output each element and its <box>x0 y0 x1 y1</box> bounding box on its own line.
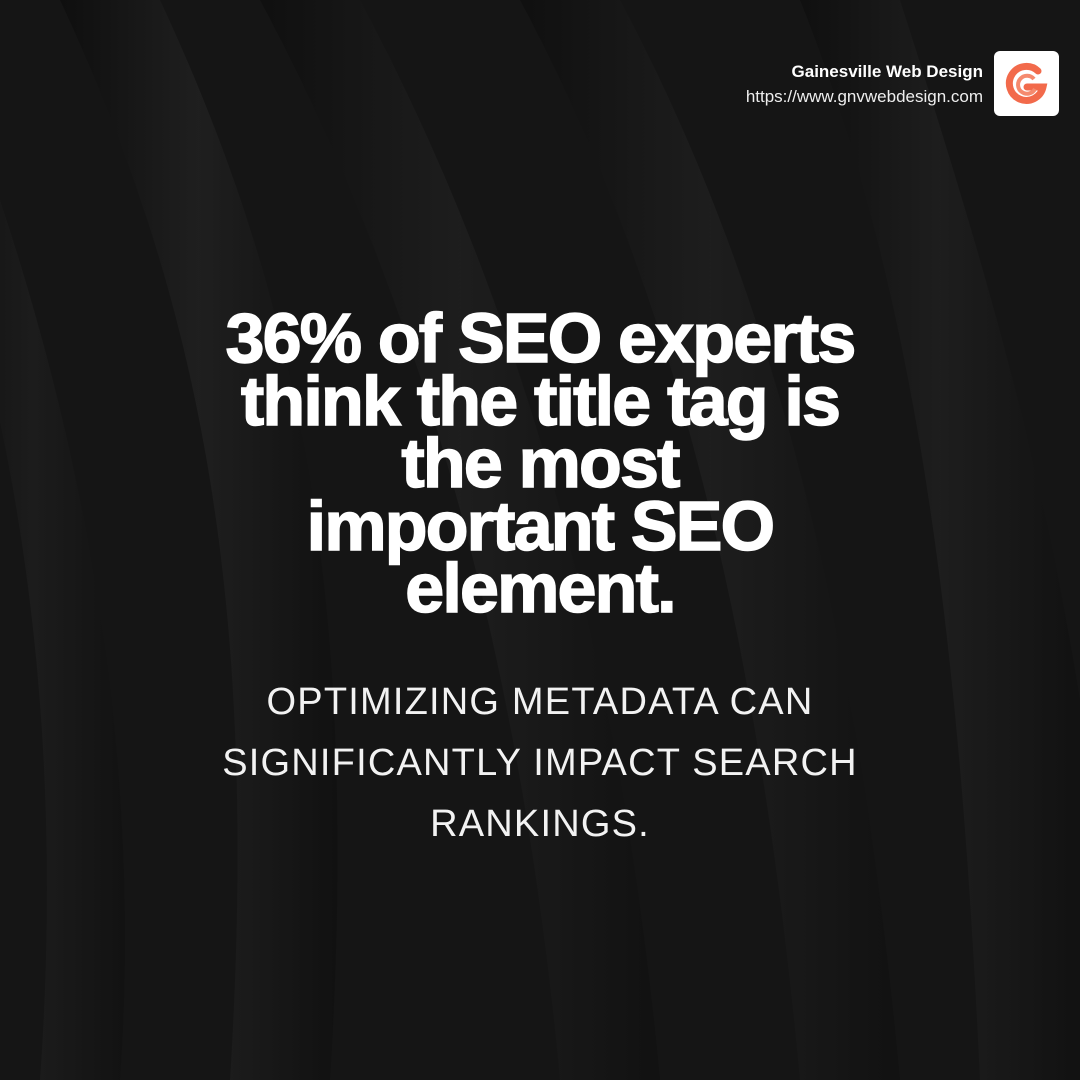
subtitle <box>222 681 858 845</box>
brand text <box>746 62 983 106</box>
title <box>226 299 854 627</box>
title: the most <box>401 424 679 502</box>
title: 36% of SEO experts <box>226 299 854 377</box>
brand text: https://www.gnvwebdesign.com <box>746 87 983 106</box>
title: think the title tag is <box>241 362 839 440</box>
title: element. <box>405 549 675 627</box>
subtitle: SIGNIFICANTLY IMPACT SEARCH <box>222 742 858 784</box>
subtitle: OPTIMIZING METADATA CAN <box>267 681 813 723</box>
subtitle: RANKINGS. <box>430 803 650 845</box>
icon: logo <box>994 51 1059 116</box>
brand text: Gainesville Web Design <box>792 62 983 81</box>
title: important SEO <box>307 486 773 564</box>
